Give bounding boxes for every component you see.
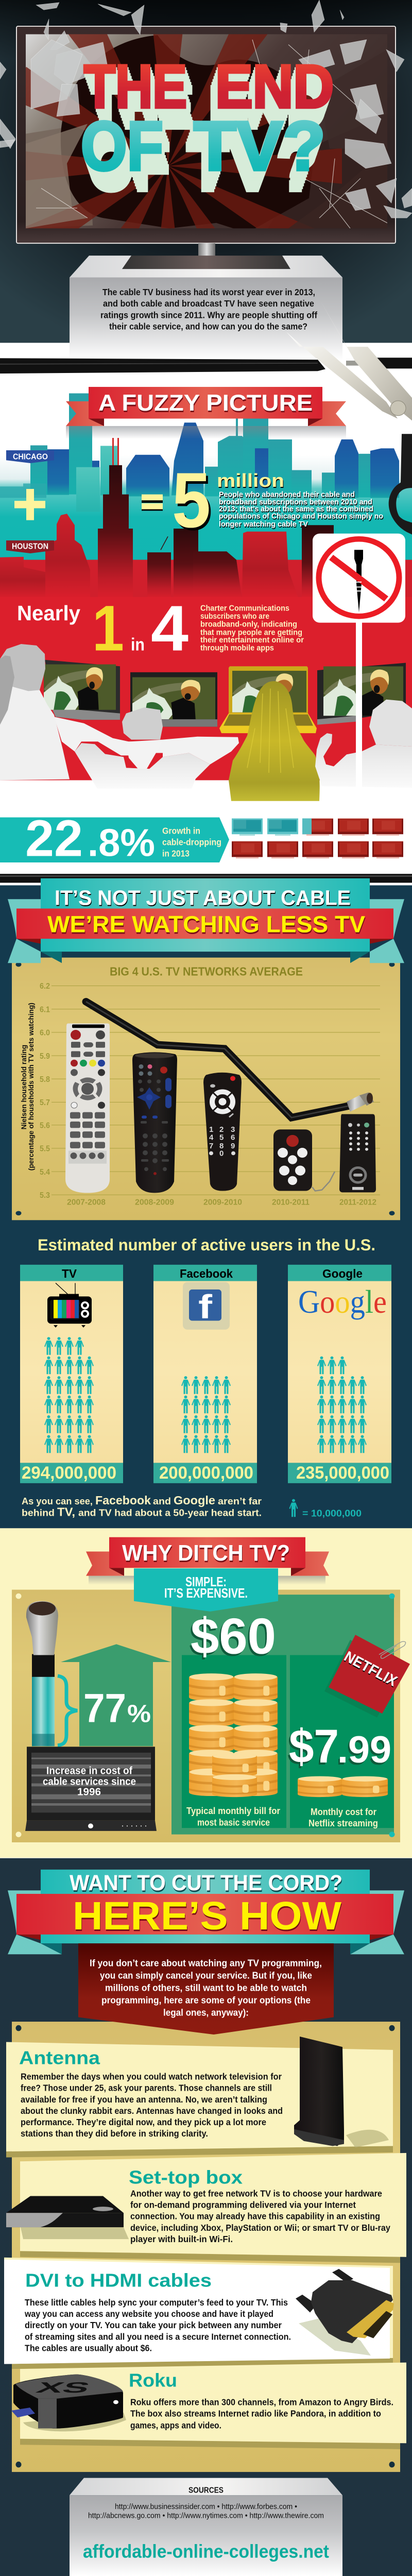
caption: typical monthly bill <box>186 1805 280 1827</box>
title word: OF: OF <box>81 108 163 185</box>
pedestal <box>70 256 342 360</box>
ribbon: A Fuzzy Picture <box>66 387 346 439</box>
caption: Netflix cost: Netflix streaming <box>308 1818 378 1828</box>
panel: a fuzzy picture <box>0 360 412 867</box>
title: The End of TV? <box>81 53 334 185</box>
x axis labels <box>67 1198 376 1207</box>
title word: END: END <box>215 53 334 121</box>
text: Set-top box body: Another way to get free network TV is to choose your hardware <box>130 2189 382 2198</box>
icon: DVI connector <box>296 2269 394 2355</box>
banner: 22.8% growth: in 2013 <box>162 849 190 858</box>
viewer: man with remote <box>315 700 412 788</box>
callout: intro to options: programming, here are some of your options (the <box>101 1995 311 2005</box>
card: Antenna <box>6 2037 393 2158</box>
ribbon: why ditch TV <box>86 1537 329 1585</box>
note: head start: aren’t far <box>218 1496 262 1506</box>
scissor blades <box>286 301 412 420</box>
banner: 22.8% growth: 22 <box>25 809 83 867</box>
callout: intro to options <box>78 1943 334 2035</box>
text: Set-top box body: for on-demand programming delivered via your Internet <box>130 2200 356 2210</box>
panel: we're watching less TV <box>0 874 412 1528</box>
text: Charter Communications: their entertainment online or <box>200 636 304 645</box>
panel: why ditch TV <box>0 1528 412 1858</box>
text: Charter Communications <box>200 604 304 652</box>
icon: paper clip <box>379 1641 406 1658</box>
poster pins <box>15 962 394 1215</box>
title word: TV?: TV? <box>194 108 325 185</box>
heading: we're watching less TV: WE’RE WATCHING LESS TV <box>47 911 365 937</box>
callout: intro to options: legal ones, anyway): <box>163 2007 249 2018</box>
tag: simple, it's expensive: SIMPLE: <box>185 1574 227 1589</box>
cream section background <box>0 1528 412 1858</box>
statistic: 5 million: 5 <box>172 456 211 544</box>
statistic: 5 million <box>172 456 284 544</box>
card: Roku <box>11 2363 406 2449</box>
credit: affordable-online-colleges.net: affordable-online-colleges.net <box>83 2540 329 2562</box>
heading: Set-top box: Set-top box <box>129 2166 243 2188</box>
tag: simple, it's expensive: IT’S EXPENSIVE. <box>164 1585 248 1601</box>
remote 3: black oval: 1 <box>209 1126 213 1134</box>
line: coaxial cable trend <box>86 1002 352 1117</box>
y axis labels: 5.7 <box>40 1098 50 1107</box>
column: Google: 235,000,000 <box>296 1463 389 1483</box>
title word: THE: THE <box>84 53 187 121</box>
screen 2 <box>130 672 217 727</box>
screen 1 <box>44 660 120 720</box>
text: Roku body <box>130 2397 393 2430</box>
note: Netflix <box>324 1635 410 1718</box>
caption: Netflix cost: Monthly cost for <box>311 1806 376 1817</box>
text: sources list: http://www.businessinsider.com • http://www.forbes.com • <box>115 2503 297 2511</box>
text: Roku body: The box also streams Internet radio like Pandora, in addition to <box>130 2409 381 2418</box>
label: Chicago: CHICAGO <box>13 453 48 461</box>
x axis labels: 2007-2008 <box>67 1198 106 1207</box>
note: head start: Facebook <box>95 1494 151 1507</box>
dark chalkboard background <box>0 0 412 343</box>
text: Antenna body: about the clunky rabbit ears. Antennas have changed in looks and <box>21 2106 283 2116</box>
television frame <box>16 26 396 243</box>
column: Facebook <box>153 1265 257 1483</box>
text: Set-top box body: player with built-in Wi-Fi. <box>130 2234 233 2244</box>
heading: why ditch TV: WHY DITCH TV? <box>122 1541 290 1566</box>
paper poster <box>12 2022 400 2472</box>
text: Antenna body: available for free if you have an antenna. No, we aren’t talking <box>21 2094 267 2105</box>
text: increase in cost: 1996 <box>77 1786 101 1798</box>
note: head start: and TV had about a 50-year head start. <box>78 1507 262 1518</box>
icon: Facebook logo <box>183 1282 230 1330</box>
legend: one person equals ten million <box>289 1499 362 1518</box>
text: people who abandoned cable: populations of Chicago and Houston simply no <box>219 513 383 521</box>
text: Set-top box body: device, including Xbox, PlayStation or Wii; or smart TV or Blu-ray <box>130 2223 390 2233</box>
banner: 22.8% growth: .8% <box>88 822 155 865</box>
ribbon: want to cut the cord <box>8 1870 404 1954</box>
column: TV: TV <box>62 1267 77 1280</box>
heading: A Fuzzy Picture: A FUZZY PICTURE <box>98 390 313 416</box>
note: head start: behind <box>22 1507 55 1518</box>
statistic: 5 million: million <box>217 470 284 491</box>
statistic: nearly 1 in 4: in <box>131 635 145 654</box>
text: DVI body: way you can access any website you choose and have it played <box>24 2309 273 2319</box>
label: Houston: HOUSTON <box>12 543 48 551</box>
pictogram: TV users <box>44 1337 94 1453</box>
note: head start: and <box>153 1496 171 1506</box>
no-cable sign <box>313 534 405 788</box>
note: head start: TV, <box>57 1505 75 1518</box>
x axis labels: 2010-2011 <box>272 1198 310 1207</box>
text: DVI body: These little cables help sync your computer’s feed to your TV. This <box>25 2297 288 2308</box>
x axis labels: 2008-2009 <box>135 1198 174 1207</box>
paper poster <box>12 1590 400 1842</box>
icon: retro television <box>47 1283 92 1328</box>
intro paragraph <box>100 287 317 331</box>
logo: Google: Google <box>298 1284 387 1320</box>
column: TV <box>20 1265 123 1483</box>
text: DVI body: of streaming sites and all you need is a secure Internet connection. <box>25 2332 291 2342</box>
laptop <box>219 666 317 733</box>
sky to teal background <box>0 360 412 598</box>
text: people who abandoned cable <box>219 491 383 529</box>
icon: stripped cable <box>26 1601 58 1746</box>
label: Houston <box>6 540 54 553</box>
note: Netflix: NETFLIX <box>341 1648 400 1690</box>
y axis title: Nielsen household rating <box>20 1045 28 1129</box>
navy section background <box>0 885 412 1528</box>
text: Charter Communications: that many people are getting <box>200 629 302 637</box>
text: Antenna body: performance. They’re digital now, and they pick up a lot more <box>21 2117 266 2127</box>
panel: here's how <box>0 1858 412 2576</box>
statistic: $7.99: $7 <box>289 1720 339 1773</box>
y axis labels: 5.6 <box>40 1122 50 1130</box>
text: increase in cost: Increase in cost of <box>46 1765 132 1776</box>
chart gridlines <box>52 986 380 1195</box>
text: sources list <box>88 2503 324 2520</box>
heading: DVI to HDMI cables: DVI to HDMI cables <box>25 2269 212 2291</box>
callout: intro to options: If you don’t care about watching any TV programming, <box>90 1958 322 1968</box>
banner: 22.8% growth <box>0 809 229 867</box>
pedestal: sources and credit <box>70 2478 342 2576</box>
remote 3: black oval: 9 <box>231 1142 235 1150</box>
statistic: nearly 1 in 4: 4 <box>151 593 188 665</box>
heading: it's not just about cable: IT’S NOT JUST ABOUT CABLE <box>55 886 351 910</box>
pictogram: Google users <box>317 1357 367 1453</box>
poster paper <box>12 958 400 1220</box>
heading: sources: SOURCES <box>188 2486 224 2495</box>
statistic: nearly 1 in 4 <box>17 593 188 665</box>
statistic: nearly 1 in 4: Nearly <box>17 602 80 625</box>
y axis labels: 5.8 <box>40 1075 50 1084</box>
statistic: 77%: 77 <box>83 1686 126 1731</box>
icon: scissors cutting cable <box>0 301 412 535</box>
coin stacks: $7.99 <box>298 1776 388 1797</box>
y axis labels <box>40 982 50 1200</box>
statistic: $7.99: .99 <box>337 1728 391 1771</box>
column: Facebook: 200,000,000 <box>159 1463 253 1483</box>
text: people who abandoned cable: People who abandoned their cable and <box>219 491 355 499</box>
viewer: woman with ponytail <box>0 644 70 780</box>
intro paragraph: The cable TV business had its worst year ever in 2013, <box>102 287 315 297</box>
y axis labels: 5.4 <box>40 1168 50 1177</box>
scissor handle <box>389 434 412 535</box>
remote 5: slim black <box>339 1114 376 1192</box>
note: head start <box>22 1494 262 1518</box>
text: Set-top box body: connection. You may already have this capability in an existing <box>130 2211 380 2222</box>
text: Antenna body: free? Those under 25, ask your parents. Those channels are still <box>21 2083 272 2093</box>
y axis title: (percentage of households with TV sets watching) <box>27 1003 35 1171</box>
text: DVI body <box>24 2297 291 2353</box>
paper poster with chart <box>12 958 400 1220</box>
screen 4 <box>317 663 406 725</box>
equals sign <box>142 495 163 511</box>
x axis labels: 2009-2010 <box>203 1198 242 1207</box>
column: TV: 294,000,000 <box>22 1463 116 1483</box>
y axis labels: 5.5 <box>40 1145 50 1154</box>
y axis labels: 5.3 <box>40 1191 50 1200</box>
intro paragraph: ratings growth since 2011. Why are people shutting off <box>100 310 317 320</box>
remote 3: black oval: 8 <box>219 1142 224 1150</box>
caption: typical monthly bill: Typical monthly bill for <box>186 1805 280 1816</box>
panel: header with broken television <box>0 0 412 360</box>
statistic: 77%: % <box>127 1700 151 1727</box>
heading: Roku: Roku <box>129 2369 177 2391</box>
tag: simple, it's expensive <box>134 1568 278 1612</box>
statistic: nearly 1 in 4: 1 <box>92 593 124 665</box>
callout: intro to options: you can simply cancel your service. But if you, like <box>100 1970 312 1980</box>
text: Set-top box body <box>130 2189 390 2244</box>
heading: estimated active users: Estimated number of active users in the U.S. <box>38 1235 375 1254</box>
viewer: blonde woman <box>229 681 320 801</box>
text: Roku body: games, apps and video. <box>130 2420 221 2430</box>
label: Chicago <box>6 450 54 463</box>
television stand neck and base <box>122 243 290 269</box>
green price panel <box>171 1595 394 1835</box>
plus sign <box>14 489 45 520</box>
y axis labels: 5.9 <box>40 1052 50 1061</box>
ribbon: it's not just about cable / we're watching less TV <box>8 878 404 963</box>
heading: want to cut the cord: WANT TO CUT THE CORD? <box>70 1871 342 1895</box>
text: Antenna body <box>21 2072 283 2139</box>
chart title: BIG 4 U.S. TV NETWORKS AVERAGE <box>110 965 303 978</box>
card: DVI to HDMI cables <box>4 2258 394 2369</box>
remote 3: black oval: 6 <box>231 1134 235 1142</box>
icon: antenna <box>294 2037 389 2147</box>
icon: Roku box <box>11 2375 126 2431</box>
arrow: cost increase <box>61 1644 171 1746</box>
chart: grid of ten televisions <box>232 818 403 858</box>
text: Charter Communications: broadband-only, indicating <box>200 620 297 629</box>
text: Antenna body: stations than they did before in striking clarity. <box>21 2128 208 2139</box>
legend: one person equals ten million: = 10,000,000 <box>302 1508 362 1518</box>
card: Set-top box <box>6 2153 406 2263</box>
remote 3: black oval: 7 <box>209 1142 213 1150</box>
cable pieces <box>0 358 412 374</box>
x axis labels: 2011-2012 <box>339 1198 376 1207</box>
static television <box>25 1747 157 1831</box>
text: people who abandoned cable: longer watching cable TV <box>219 520 308 529</box>
icon: Facebook logo: f <box>198 1289 213 1326</box>
text: increase in cost: cable services since <box>43 1776 136 1787</box>
y axis labels: 6.0 <box>40 1029 50 1038</box>
text: Antenna body: Remember the days when you could watch network television for <box>21 2072 282 2081</box>
y axis labels: 6.2 <box>40 982 50 991</box>
viewer: man with hands behind head <box>54 707 239 789</box>
note: head start: As you can see, <box>22 1496 93 1506</box>
caption: typical monthly bill: most basic service <box>197 1817 270 1827</box>
remote 3: black oval <box>203 1073 242 1191</box>
remote 3: black oval: 0 <box>219 1150 224 1158</box>
column: Facebook: Facebook <box>180 1267 233 1280</box>
icon: set-top box <box>6 2196 129 2239</box>
remote 3: black oval: 3 <box>231 1126 235 1134</box>
text: Charter Communications: Charter Communications <box>200 604 289 613</box>
intro paragraph: and both cable and broadcast TV have seen negative <box>103 299 314 309</box>
dark section background <box>0 1858 412 2576</box>
remote 1: white <box>65 1024 110 1193</box>
text: sources list: http://abcnews.go.com • http://www.nytimes.com • http://www.thewire.com <box>88 2512 324 2520</box>
y axis title <box>20 1003 35 1171</box>
statistic: $7.99 <box>289 1720 391 1773</box>
note: head start: Google <box>174 1494 215 1507</box>
pictogram: Facebook users <box>181 1376 231 1453</box>
statistic: $60: $60 <box>191 1608 276 1665</box>
banner: 22.8% growth: cable-dropping <box>162 837 221 847</box>
remote 2: black long <box>132 1052 177 1193</box>
remote 3: black oval: 2 <box>219 1126 224 1134</box>
intro paragraph: their cable service, and how can you do the same? <box>109 321 307 331</box>
column: Google <box>288 1265 391 1483</box>
television screen with hole and rays <box>26 34 387 229</box>
Chicago skyline <box>0 438 412 780</box>
text: people who abandoned cable: broadband subscriptions between 2010 and <box>219 498 372 506</box>
text: Charter Communications: through mobile apps <box>200 644 274 652</box>
remote 4: small with keyring <box>273 1129 335 1191</box>
text: DVI body: directly on your TV. You can take your pick between any number <box>25 2320 282 2330</box>
heading: here's how: HERE’S HOW <box>73 1894 341 1938</box>
icon: cable connector <box>347 1092 374 1112</box>
icon: Roku box: XS <box>33 2379 93 2396</box>
remote 3: black oval: 4 <box>209 1134 214 1142</box>
bracket <box>58 1676 77 1745</box>
screens showing the same show <box>44 660 406 733</box>
text: increase in cost <box>43 1765 136 1798</box>
banner: 22.8% growth: Growth in <box>162 826 200 836</box>
text: Charter Communications: subscribers who are <box>200 612 269 621</box>
text: people who abandoned cable: 2013; that’s about the same as the combined <box>219 505 373 513</box>
heading: Antenna: Antenna <box>19 2047 100 2069</box>
statistic: 77% <box>83 1686 151 1731</box>
glass shards <box>0 0 412 218</box>
text: DVI body: The cables are usually about $6. <box>25 2343 152 2353</box>
column: Google: Google <box>322 1267 363 1280</box>
coin stacks: $60 <box>189 1673 278 1797</box>
poster pins <box>15 1594 394 1837</box>
Houston skyline <box>0 393 399 512</box>
remote 3: black oval: 5 <box>219 1134 224 1142</box>
icon: cable plug <box>354 550 363 612</box>
black cable divider <box>0 874 412 885</box>
y axis labels: 6.1 <box>40 1006 50 1014</box>
caption: Netflix cost <box>308 1806 378 1828</box>
callout: intro to options: millions of others, still want to be able to watch <box>105 1982 307 1993</box>
poster pins <box>15 2025 394 2467</box>
